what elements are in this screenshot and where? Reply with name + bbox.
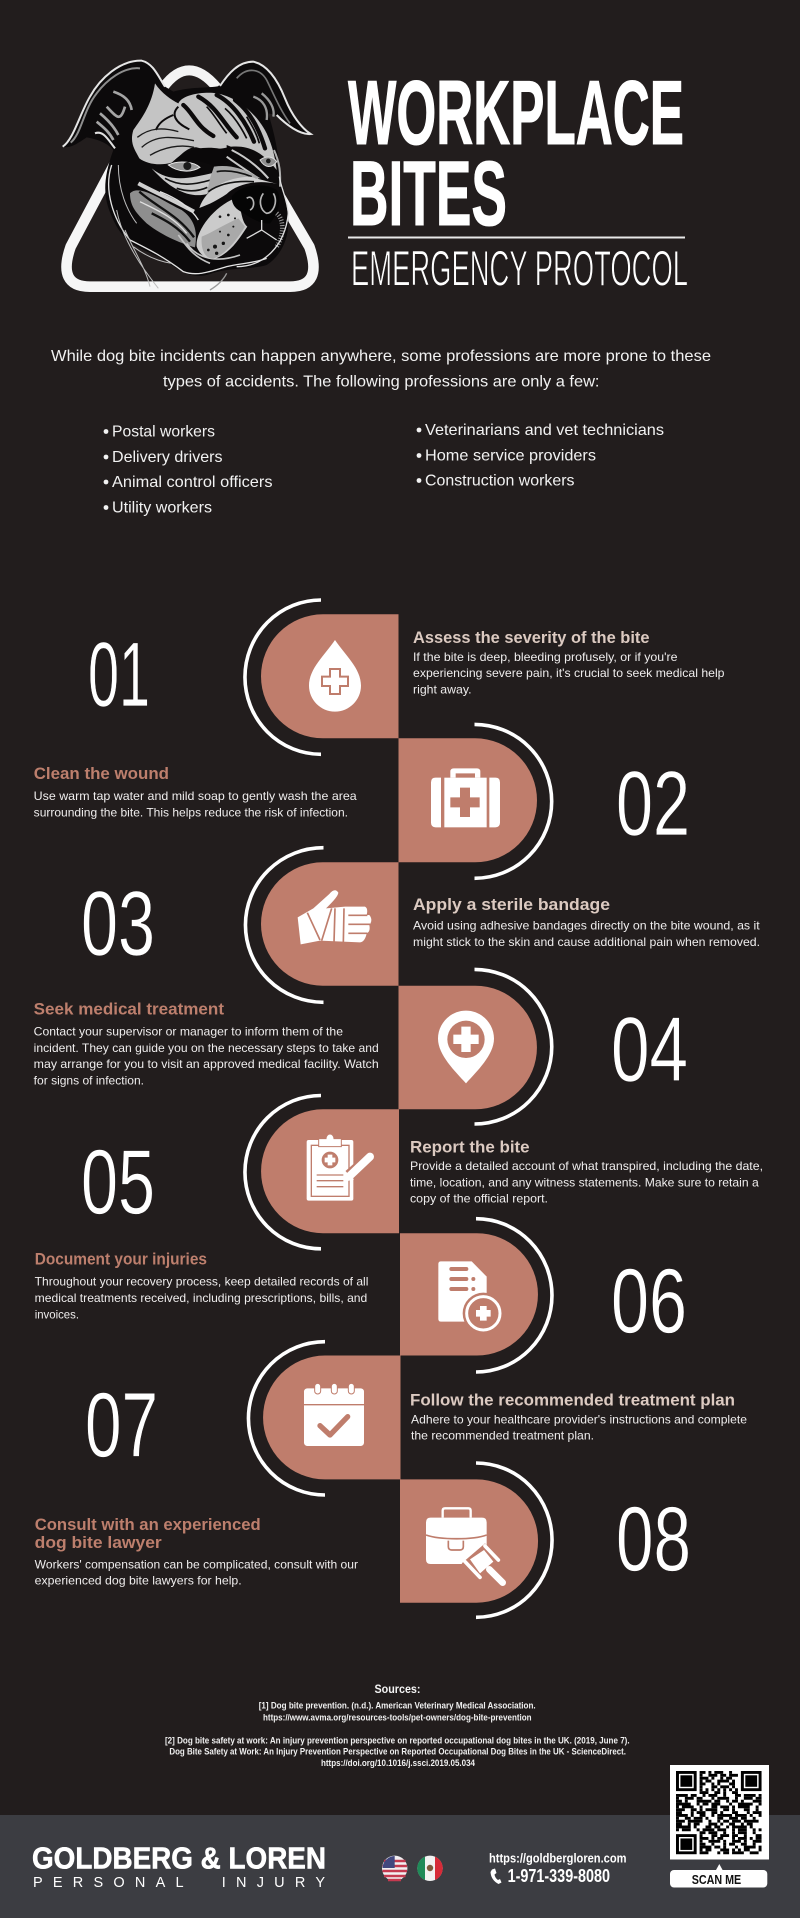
step heading: Assess the severity of the bite: [413, 628, 650, 647]
step heading: dog bite lawyer: [35, 1533, 162, 1552]
eyes: [168, 162, 200, 171]
step heading: Apply a sterile bandage: [413, 895, 610, 914]
scan me label: SCAN ME: [692, 1872, 741, 1887]
icon: bandaged hand: [298, 890, 371, 944]
scan me label: [670, 1864, 767, 1888]
number 04: 04: [611, 999, 688, 1101]
panel: step 5: [81, 1096, 763, 1249]
neck and jaw lines: [109, 165, 267, 274]
list: professions right column: Home service providers: [425, 448, 596, 464]
forehead: [132, 83, 277, 170]
step text: Adhere to your healthcare provider's instructions and complete: [411, 1412, 747, 1426]
step heading: Report the bite: [410, 1138, 530, 1156]
muzzle: [197, 198, 247, 259]
number 01: 01: [88, 624, 150, 726]
step text: experienced dog bite lawyers for help.: [35, 1574, 242, 1588]
step text: the recommended treatment plan.: [411, 1428, 594, 1442]
panel: step 8: [35, 1463, 691, 1617]
brow shadow: [170, 148, 232, 166]
list: professions right column: [417, 422, 664, 490]
sources: [165, 1682, 630, 1768]
icon: calendar check: [304, 1383, 364, 1446]
logo: Goldberg & Loren: GOLDBERG & LOREN: [32, 1840, 326, 1876]
panel: step 6: [35, 1219, 687, 1372]
step text: [411, 1412, 747, 1442]
icon: map pin: [438, 1011, 494, 1083]
icon: blood drop: [309, 640, 361, 712]
sources: https://doi.org/10.1016/j.ssci.2019.05.034: [321, 1758, 475, 1768]
panel: step 2: [34, 724, 690, 878]
step text: [413, 918, 760, 949]
step text: [35, 1274, 368, 1322]
step text: Throughout your recovery process, keep detailed records of all: [35, 1274, 368, 1288]
contact details: https://goldbergloren.com: [489, 1850, 626, 1866]
step text: Use warm tap water and mild soap to gently wash the area: [34, 789, 357, 803]
step text: Avoid using adhesive bandages directly on the bite wound, as it: [413, 918, 760, 932]
step text: incident. They can guide you on the necessary steps to take and: [34, 1041, 379, 1055]
step text: experiencing severe pain, it's crucial to seek medical help: [413, 666, 725, 680]
icon: briefcase and gavel: [426, 1508, 507, 1587]
step heading: Follow the recommended treatment plan: [410, 1390, 735, 1410]
logo: Goldberg & Loren: [32, 1840, 326, 1891]
panel: step 7: [85, 1342, 747, 1495]
icon: medical document: [438, 1261, 504, 1334]
step heading: Document your injuries: [35, 1250, 207, 1268]
title: [348, 63, 688, 296]
sources: Dog Bite Safety at Work: An Injury Prevention Perspective on Reported Occupational Dog Bites in the UK - ScienceDirect.: [169, 1746, 626, 1756]
number 06: 06: [611, 1250, 687, 1352]
icon: US flag: [382, 1856, 407, 1881]
panel: step 3: [81, 848, 760, 1002]
icon: bulldog head on triangular tag: [63, 61, 313, 290]
icon: Mexican flag: [417, 1856, 443, 1881]
sources: Sources:: [374, 1682, 420, 1696]
step heading: Clean the wound: [34, 764, 169, 783]
list: professions right column: Veterinarians and vet technicians: [425, 422, 664, 439]
step heading: Consult with an experienced: [35, 1515, 261, 1534]
step text: [413, 650, 725, 696]
QR code: [670, 1765, 769, 1860]
step text: Workers' compensation can be complicated, consult with our: [35, 1558, 358, 1572]
logo: Goldberg & Loren: PERSONAL INJURY: [33, 1875, 325, 1891]
number 03: 03: [81, 873, 155, 975]
step text: If the bite is deep, bleeding profusely, or if you're: [413, 650, 678, 664]
step text: right away.: [413, 682, 472, 696]
intro text: types of accidents. The following professions are only a few:: [163, 374, 600, 390]
contact details: 1-971-339-8080: [508, 1866, 610, 1886]
sources: https://www.avma.org/resources-tools/pet-owners/dog-bite-prevention: [263, 1712, 532, 1722]
step text: Contact your supervisor or manager to inform them of the: [34, 1024, 343, 1038]
step text: may arrange for you to visit an approved medical facility. Watch: [34, 1057, 379, 1071]
panel: step 1: [88, 600, 725, 754]
intro text: [51, 348, 711, 390]
step text: Provide a detailed account of what transpired, including the date,: [410, 1159, 763, 1173]
list: professions left column: [104, 424, 272, 516]
sources: [2] Dog bite safety at work: An injury prevention perspective on reported occupational dog bites in the UK. (2019, June 7).: [165, 1736, 630, 1746]
step text: surrounding the bite. This helps reduce the risk of infection.: [34, 806, 348, 820]
list: professions right column: Construction workers: [425, 472, 574, 490]
panel: step 4: [34, 969, 688, 1124]
icon: first aid kit: [431, 768, 500, 827]
step text: copy of the official report.: [410, 1192, 548, 1206]
step text: time, location, and any witness statements. Make sure to retain a: [410, 1176, 759, 1190]
list: professions left column: Delivery drivers: [112, 449, 222, 466]
nose: [232, 185, 279, 224]
step text: [35, 1558, 358, 1588]
icon: medical clipboard: [307, 1134, 371, 1201]
list: professions left column: Animal control officers: [112, 474, 272, 491]
cheek under eye: [152, 168, 215, 195]
list: professions left column: Utility workers: [112, 500, 212, 516]
mid grey cheek: [130, 190, 196, 247]
icon: phone: [490, 1868, 502, 1884]
number 07: 07: [85, 1374, 158, 1476]
step text: [410, 1159, 763, 1206]
intro text: While dog bite incidents can happen anywhere, some professions are more prone to these: [51, 348, 711, 365]
step text: [34, 1024, 379, 1088]
step heading: Seek medical treatment: [34, 1000, 224, 1018]
muzzle fold: [207, 166, 261, 194]
contact details: [489, 1850, 626, 1886]
number 02: 02: [616, 753, 690, 855]
number 08: 08: [616, 1488, 691, 1590]
step text: medical treatments received, including prescriptions, bills, and: [35, 1291, 367, 1305]
step text: for signs of infection.: [34, 1074, 144, 1088]
step text: [34, 789, 357, 820]
title line: bites: BITES: [350, 143, 507, 245]
step text: might stick to the skin and cause additional pain when removed.: [413, 935, 760, 949]
step text: invoices.: [35, 1308, 79, 1322]
list: professions left column: Postal workers: [112, 424, 215, 440]
number 05: 05: [81, 1132, 155, 1234]
step heading: [35, 1515, 261, 1552]
sources: [1] Dog bite prevention. (n.d.). American Veterinary Medical Association.: [259, 1700, 536, 1710]
footer bar: [0, 1815, 800, 1918]
